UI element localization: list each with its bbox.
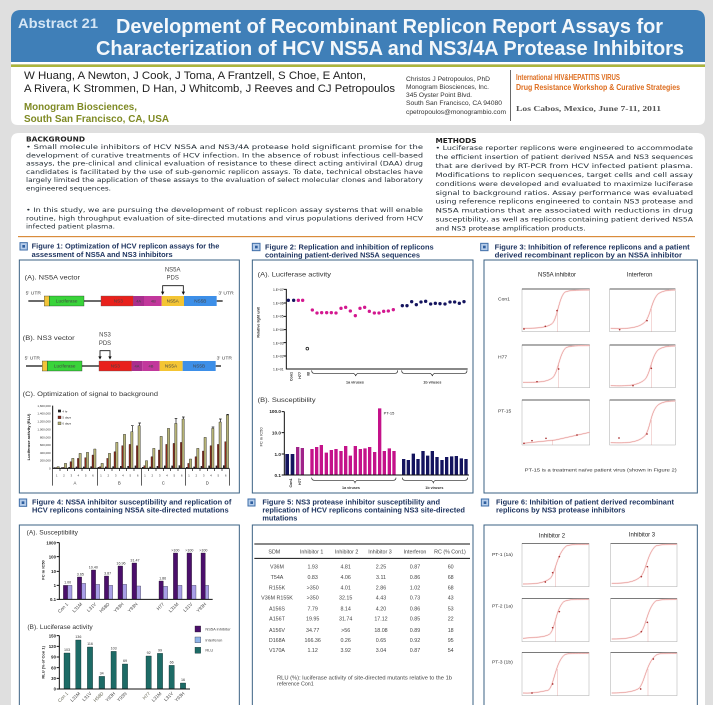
- NS5A vector diagram: Luciferase: [56, 299, 78, 304]
- methods text: susceptibility, as well as replicons containing patient derived NS5A: [436, 216, 694, 224]
- susceptibility bar chart: >100: [199, 548, 207, 552]
- NS5A vector diagram: 5' UTR: [26, 290, 41, 296]
- signal to background bar chart: 4: [77, 473, 79, 477]
- susceptibility bar chart: 0.1: [50, 597, 57, 602]
- luciferase activity dot plot: Con1: [290, 372, 294, 381]
- luciferase activity dot plot: 1.E+03: [273, 341, 284, 345]
- susceptibility bar chart: Y93H: [113, 602, 125, 613]
- mutation table: 17.12: [374, 617, 388, 623]
- susceptibility bar chart: 1a viruses: [342, 486, 360, 490]
- signal to background bar chart: 1,600,000: [37, 404, 51, 408]
- NS3 vector diagram: NS3: [99, 333, 111, 339]
- mutation table: A156V: [269, 628, 285, 634]
- dose response curves: [522, 289, 675, 445]
- workshop location: Los Cabos, Mexico, June 7-11, 2011: [516, 104, 661, 113]
- susceptibility bar chart: Con1: [289, 478, 293, 487]
- panel: figure 5: [248, 499, 473, 705]
- workshop name: Drug Resistance Workshop & Curative Strategies: [516, 83, 680, 92]
- signal to background bar chart: 2: [63, 473, 65, 477]
- mutation table: 34.77: [306, 628, 319, 634]
- luciferase activity bar chart: Con 1: [57, 691, 69, 703]
- susceptibility bar chart: 10.0: [272, 430, 281, 435]
- susceptibility bar chart: 100: [49, 554, 57, 559]
- luciferase activity bar chart: 90: [51, 655, 57, 660]
- methods text: METHODS: [436, 137, 476, 145]
- NS3 vector diagram: 4A: [135, 364, 140, 369]
- signal to background bar chart: [23, 391, 229, 486]
- mutation table: 22: [448, 617, 454, 623]
- luciferase activity bar chart: 103: [111, 646, 117, 650]
- figure 1 heading: Figure 1: Optimization of HCV replicon assays for the: [32, 244, 219, 251]
- mutation table: 1.12: [307, 648, 318, 654]
- authors: A Rivera, K Strommen, D Han, J Whitcomb, J Reeves and CJ Petropoulos: [24, 83, 395, 95]
- mutation table: 0.87: [410, 648, 420, 654]
- mutation table: 32.15: [339, 596, 352, 602]
- mutation table: 0.86: [410, 607, 420, 613]
- luciferase activity bar chart: Y93H: [174, 691, 186, 703]
- signal to background bar chart: 800,000: [40, 435, 51, 439]
- legend: RLU: [205, 648, 213, 653]
- column headers: Interferon: [627, 273, 652, 279]
- susceptibility bar chart: 3.87: [104, 571, 111, 575]
- row labels: PT-15: [498, 409, 512, 415]
- signal to background bar chart: 5 days: [62, 416, 72, 420]
- signal to background bar chart: 400,000: [40, 451, 51, 455]
- luciferase activity dot plot: 1.E+07: [273, 288, 284, 292]
- title: Development of Recombinant Replicon Report Assays for: [116, 16, 663, 38]
- NS3 vector diagram: PDS: [99, 341, 111, 347]
- figure 3 note: PT-15 is a treatment naïve patient virus (shown in Figure 2): [525, 468, 677, 474]
- susceptibility bar chart: [27, 530, 213, 614]
- methods text: the efficient insertion of patient derived NS5A and NS3 sequences: [436, 153, 694, 161]
- signal to background bar chart: A: [74, 480, 77, 485]
- mutation table: 4.01: [340, 586, 351, 592]
- signal to background bar chart: 5: [129, 473, 131, 477]
- signal to background bar chart: 1: [100, 473, 102, 477]
- row labels: PT-2 (1a): [492, 603, 513, 609]
- figure 4 heading: Figure 4: NS5A inhibitor susceptibility and replication of: [32, 500, 232, 507]
- figure 4 heading: HCV replicons containing NS5A site-directed mutations: [32, 508, 229, 515]
- susceptibility bar chart: (B). Susceptibility: [258, 397, 316, 404]
- luciferase activity bar chart: L31M: [151, 691, 163, 703]
- signal to background bar chart: B: [118, 480, 121, 485]
- NS5A vector diagram: 3' UTR: [218, 290, 234, 296]
- luciferase activity bar chart: Y93N: [116, 691, 128, 703]
- luciferase activity bar chart: RLU (% of Con 1): [41, 645, 46, 679]
- mutation table: 0.26: [340, 638, 351, 644]
- NS3 vector diagram: NS5B: [193, 364, 205, 369]
- susceptibility bar chart: (A). Susceptibility: [27, 530, 79, 537]
- mutation table: 4.06: [340, 575, 351, 581]
- NS5A vector diagram: 4A: [136, 299, 141, 304]
- luciferase activity bar chart: 150: [49, 633, 57, 638]
- luciferase activity bar chart: L31V: [81, 690, 93, 702]
- background text: assays, the pre-clinical and clinical evaluation of resistance to these direct acting antiviral (DAA) drug: [26, 160, 423, 168]
- signal to background bar chart: 3: [203, 473, 205, 477]
- susceptibility bar chart: 1.86: [159, 576, 166, 580]
- mutation table: R155K: [269, 586, 286, 592]
- susceptibility bar chart: 1.00: [64, 581, 71, 585]
- susceptibility bar chart: 1000: [46, 540, 57, 545]
- figure 1 heading: assessment of NS5A and NS3 inhibitors: [32, 252, 173, 259]
- NS5A vector diagram: NS3: [114, 299, 123, 304]
- methods text: signal to background ratios. Assay performance was evaluated: [436, 189, 693, 197]
- background text: engineered sequences.: [26, 184, 111, 192]
- signal to background bar chart: 600,000: [40, 443, 51, 447]
- susceptibility bar chart: H77: [156, 601, 166, 611]
- signal to background bar chart: D: [206, 480, 209, 485]
- luciferase activity bar chart: 120: [49, 644, 57, 649]
- methods text: Modifications to replicon sequences, target cells and cell assay: [436, 171, 693, 179]
- signal to background bar chart: 1,200,000: [37, 420, 51, 424]
- column headers: Inhibitor 3: [629, 532, 656, 538]
- authors panel: [11, 67, 705, 125]
- luciferase activity dot plot: 1a viruses: [346, 381, 364, 385]
- mutation table: 0.92: [410, 638, 420, 644]
- background text: largely limited the application of these assays to the evaluation of select molecular clones and laboratory: [26, 176, 423, 184]
- luciferase activity bar chart: 0: [54, 687, 57, 692]
- susceptibility bar chart: Y93N: [127, 602, 139, 613]
- mutation table: A156S: [269, 607, 285, 613]
- legend: Interferon: [205, 638, 222, 643]
- luciferase activity bar chart: H77: [142, 691, 152, 701]
- column headers: NS5A inhibitor: [538, 273, 576, 279]
- mutation table: 1.93: [307, 565, 318, 571]
- mutation table: V170A: [269, 648, 285, 654]
- mutation table: 0.73: [410, 596, 420, 602]
- NS5A vector diagram: NS5A: [165, 268, 180, 274]
- signal to background bar chart: 6: [225, 473, 227, 477]
- mutation table: 4.43: [376, 596, 386, 602]
- mutation table: 43: [448, 596, 454, 602]
- susceptibility bar chart: L31M: [168, 602, 180, 613]
- susceptibility bar chart: Y93H: [195, 602, 207, 613]
- methods text: • Luciferase reporter replicons were engineered to accommodate: [436, 144, 693, 152]
- signal to background bar chart: 1: [56, 473, 58, 477]
- signal to background bar chart: 4: [122, 473, 124, 477]
- mutation table: 0.87: [410, 565, 420, 571]
- mutation table: Inhibitor 3: [368, 550, 392, 556]
- mutation table: 60: [448, 565, 454, 571]
- mutation table: 18: [448, 628, 454, 634]
- background text: [26, 136, 424, 231]
- dose response curves: [522, 543, 677, 696]
- panel: figure 4: [19, 499, 239, 705]
- row labels: Con1: [498, 297, 510, 303]
- susceptibility bar chart: [258, 397, 469, 490]
- signal to background bar chart: 5: [85, 473, 87, 477]
- signal to background bar chart: 6: [92, 473, 94, 477]
- luciferase activity dot plot: 1b viruses: [423, 381, 441, 385]
- susceptibility bar chart: H77: [298, 478, 302, 485]
- luciferase activity bar chart: H58D: [93, 691, 105, 703]
- susceptibility bar chart: >100: [171, 548, 179, 552]
- mutation table: 53: [448, 607, 454, 613]
- mutation table: 0.85: [410, 617, 420, 623]
- mutation table: D168A: [269, 638, 286, 644]
- luciferase activity dot plot: 1.E+05: [273, 315, 284, 319]
- luciferase activity bar chart: [27, 624, 190, 703]
- luciferase activity bar chart: 34: [100, 671, 104, 675]
- title: Characterization of HCV NS5A and NS3/4A Protease Inhibitors: [96, 38, 684, 60]
- mutation table: 3.92: [340, 648, 351, 654]
- mutation table: 3.11: [376, 575, 386, 581]
- NS3 vector diagram: [23, 333, 232, 371]
- contact details: 345 Oyster Point Blvd.: [406, 93, 472, 99]
- methods text: NS5A mutations that are associated with reductions in drug: [436, 207, 693, 215]
- figure 2 heading: Figure 2: Replication and inhibition of replicons: [265, 244, 434, 251]
- luciferase activity bar chart: (B). Luciferase activity: [27, 624, 93, 631]
- background text: BACKGROUND: [26, 136, 85, 144]
- background text: candidates is facilitated by the use of sub-genomic replicon assays. To date, technical obstacles have: [26, 168, 423, 176]
- row labels: PT-3 (1b): [492, 659, 513, 665]
- luciferase activity bar chart: 116: [87, 642, 93, 646]
- signal to background bar chart: 4 hr: [62, 409, 67, 413]
- NS3 vector diagram: NS5A: [165, 364, 178, 369]
- legend: [195, 626, 231, 653]
- table footnote: RLU (%): luciferase activity of site-directed mutants relative to the 1b: [277, 676, 452, 682]
- background text: routine, high throughput evaluation of site-directed mutations and virus populations derived from HCV: [26, 214, 424, 222]
- figure 5 heading: Figure 5: NS3 protease inhibitor susceptibility and: [262, 499, 440, 506]
- luciferase activity dot plot: 1.E+06: [273, 301, 284, 305]
- signal to background bar chart: 4: [210, 473, 212, 477]
- signal to background bar chart: 3: [70, 473, 72, 477]
- luciferase activity bar chart: 16: [181, 678, 185, 682]
- mutation table: 2.86: [376, 586, 386, 592]
- mutation table: T54A: [271, 575, 284, 581]
- mutation table: V36M: [270, 565, 284, 571]
- signal to background bar chart: Luciferase activity (RLU): [26, 413, 31, 460]
- susceptibility bar chart: 3.65: [77, 572, 84, 576]
- NS3 vector diagram: Luciferase: [54, 364, 76, 369]
- luciferase activity dot plot: Relative light unit: [257, 306, 261, 338]
- NS5A vector diagram: 4B: [151, 299, 156, 304]
- mutation table: 2.25: [376, 565, 386, 571]
- luciferase activity bar chart: L31M: [69, 691, 81, 703]
- susceptibility bar chart: L31V: [86, 601, 98, 613]
- mutation table: [254, 544, 470, 654]
- luciferase activity bar chart: 92: [147, 651, 151, 655]
- mutation table: 0.89: [410, 628, 420, 634]
- column headers: Inhibitor 2: [539, 533, 566, 539]
- susceptibility bar chart: 0.1: [275, 473, 281, 478]
- luciferase activity dot plot: IB: [306, 372, 310, 376]
- luciferase activity bar chart: 103: [64, 648, 70, 652]
- luciferase activity bar chart: 99: [158, 648, 162, 652]
- panel: figure 2: [252, 243, 473, 493]
- luciferase activity bar chart: 69: [123, 659, 127, 663]
- main panel: [11, 133, 705, 705]
- luciferase activity dot plot: 1.E+02: [273, 355, 284, 359]
- mutation table: >350: [307, 596, 319, 602]
- figure 5 heading: replication of HCV replicons containing NS3 site-directed: [262, 507, 465, 514]
- susceptibility bar chart: 10.40: [89, 565, 98, 569]
- luciferase activity dot plot: 1.E+01: [273, 367, 284, 371]
- susceptibility bar chart: L31M: [71, 602, 83, 613]
- susceptibility bar chart: Con 1: [57, 601, 69, 614]
- row labels: H77: [498, 354, 507, 360]
- NS5A vector diagram: NS5B: [194, 299, 206, 304]
- panel: figure 3: [481, 243, 697, 493]
- mutation table: >56: [341, 628, 350, 634]
- abstract tag: Abstract 21: [18, 15, 98, 31]
- figure 3 heading: Figure 3: Inhibition of reference replicons and a patient: [495, 244, 690, 251]
- mutation table: 18.08: [374, 628, 388, 634]
- affiliation: South San Francisco, CA, USA: [24, 114, 169, 125]
- header banner: [11, 10, 705, 67]
- signal to background bar chart: 6: [137, 473, 139, 477]
- workshop name: International HIV&HEPATITIS VIRUS: [516, 73, 621, 82]
- signal to background bar chart: 3: [115, 473, 117, 477]
- contact details: Christos J Petropoulos, PhD: [406, 77, 491, 83]
- mutation table: Inhibitor 2: [335, 550, 358, 556]
- susceptibility bar chart: 1: [54, 583, 57, 588]
- background text: infected patient plasma.: [26, 223, 115, 231]
- mutation table: 1.02: [410, 586, 420, 592]
- mutation table: 4.81: [340, 565, 351, 571]
- signal to background bar chart: 4: [166, 473, 168, 477]
- mutation table: 31.74: [339, 617, 352, 623]
- methods text: that are derived by RT-PCR from HCV infected patient plasma.: [436, 162, 693, 170]
- figure 6 heading: replicons by NS3 protease inhibitors: [496, 507, 625, 514]
- mutation table: 54: [448, 648, 454, 654]
- susceptibility bar chart: PT-15: [384, 410, 395, 415]
- signal to background bar chart: 6: [181, 473, 183, 477]
- contact details: cpetropoulos@monogrambio.com: [406, 110, 506, 116]
- luciferase activity bar chart: 136: [75, 635, 81, 639]
- figure 5 heading: mutations: [262, 515, 297, 522]
- susceptibility bar chart: 100.0: [269, 409, 281, 414]
- affiliation: Monogram Biosciences,: [24, 102, 137, 113]
- mutation table: 166.36: [305, 638, 321, 644]
- signal to background bar chart: 3: [159, 473, 161, 477]
- mutation table: A156T: [269, 617, 286, 623]
- susceptibility bar chart: 16.96: [116, 561, 126, 565]
- NS3 vector diagram: NS3: [111, 364, 120, 369]
- table footnote: reference Con1: [277, 682, 314, 688]
- susceptibility bar chart: 1.0: [275, 452, 281, 457]
- signal to background bar chart: 6 days: [62, 422, 72, 426]
- susceptibility bar chart: L31V: [182, 601, 194, 613]
- contact details: Monogram Biosciences, Inc.: [406, 85, 489, 91]
- signal to background bar chart: 1,000,000: [37, 427, 51, 431]
- NS3 vector diagram: 5' UTR: [25, 355, 40, 361]
- susceptibility bar chart: 1b viruses: [425, 486, 443, 490]
- mutation table: 0.83: [307, 575, 318, 581]
- luciferase activity bar chart: 66: [170, 660, 174, 664]
- mutation table: SDM: [268, 550, 280, 556]
- mutation table: 4.20: [376, 607, 386, 613]
- authors: W Huang, A Newton, J Cook, J Toma, A Frantzell, S Choe, E Anton,: [24, 70, 366, 82]
- mutation table: 68: [448, 575, 454, 581]
- background text: • Small molecule inhibitors of HCV NS5A and NS3/4A protease hold significant promise for the: [26, 143, 423, 151]
- luciferase activity bar chart: 60: [51, 665, 57, 670]
- luciferase activity dot plot: (A). Luciferase activity: [258, 272, 332, 279]
- luciferase activity dot plot: 1.E+04: [273, 328, 284, 332]
- figure 2 heading: containing patient-derived NS5A sequences: [265, 253, 420, 260]
- figure 3 heading: derived recombinant replicon by an NS5A inhibitor: [495, 253, 682, 260]
- signal to background bar chart: 2: [195, 473, 197, 477]
- mutation table: 0.65: [376, 638, 386, 644]
- methods text: conditions were developed and evaluated to maximize luciferase: [436, 180, 693, 188]
- NS5A vector diagram: (A). NS5A vector: [25, 275, 81, 282]
- luciferase activity bar chart: L31V: [163, 690, 175, 702]
- luciferase activity bar chart: 30: [51, 676, 57, 681]
- susceptibility bar chart: 31.47: [130, 558, 140, 562]
- figure 6 heading: Figure 6: Inhibition of patient derived recombinant: [496, 499, 675, 506]
- susceptibility bar chart: FC in IC50: [41, 559, 46, 580]
- signal to background bar chart: 5: [217, 473, 219, 477]
- mutation table: V36M R155K: [261, 596, 293, 602]
- panel: figure 1: [19, 243, 239, 493]
- background text: • In this study, we are pursuing the development of robust replicon assay systems that will enable: [26, 206, 423, 214]
- signal to background bar chart: 1: [144, 473, 146, 477]
- legend: NS5A inhibitor: [205, 627, 231, 632]
- susceptibility bar chart: >100: [185, 548, 193, 552]
- mutation table: 0.86: [410, 575, 420, 581]
- luciferase activity bar chart: Y93H: [104, 691, 116, 703]
- row labels: PT-1 (1a): [492, 552, 513, 558]
- mutation table: 8.14: [340, 607, 351, 613]
- signal to background bar chart: 0: [49, 467, 51, 471]
- mutation table: 68: [448, 586, 454, 592]
- NS3 vector diagram: (B). NS3 vector: [23, 335, 76, 342]
- contact details: South San Francisco, CA 94080: [406, 101, 503, 107]
- methods text: [436, 137, 694, 232]
- mutation table: 19.95: [306, 617, 319, 623]
- luciferase activity dot plot: [257, 272, 468, 385]
- mutation table: RC (% Con1): [434, 550, 466, 556]
- signal to background bar chart: 2: [151, 473, 153, 477]
- mutation table: Interferon: [404, 550, 426, 556]
- mutation table: 7.79: [307, 607, 318, 613]
- signal to background bar chart: 2: [107, 473, 109, 477]
- NS5A vector diagram: NS5A: [167, 299, 180, 304]
- methods text: using reference replicons engineered to contain NS3 protease and: [436, 198, 693, 206]
- susceptibility bar chart: FC in IC50: [258, 427, 263, 447]
- background text: development of curative treatments of HCV infection. In the absence of robust infectious cell-based: [26, 151, 423, 159]
- signal to background bar chart: 200,000: [40, 459, 51, 463]
- mutation table: 95: [448, 638, 454, 644]
- susceptibility bar chart: H58D: [99, 601, 111, 614]
- signal to background bar chart: (C). Optimization of signal to background: [23, 391, 158, 398]
- mutation table: Inhibitor 1: [300, 550, 323, 556]
- susceptibility bar chart: 10: [51, 569, 57, 574]
- panel: figure 6: [481, 499, 697, 705]
- NS3 vector diagram: 3' UTR: [217, 355, 232, 361]
- mutation table: 3.04: [376, 648, 386, 654]
- NS5A vector diagram: [25, 268, 234, 306]
- methods text: and NS3 protease amplification products.: [436, 224, 586, 232]
- NS5A vector diagram: PDS: [167, 276, 179, 282]
- luciferase activity dot plot: H77: [298, 372, 302, 379]
- signal to background bar chart: 5: [173, 473, 175, 477]
- mutation table: >350: [307, 586, 319, 592]
- signal to background bar chart: 1,400,000: [37, 412, 51, 416]
- signal to background bar chart: C: [162, 480, 165, 485]
- signal to background bar chart: 1: [188, 473, 190, 477]
- NS3 vector diagram: 4B: [149, 364, 154, 369]
